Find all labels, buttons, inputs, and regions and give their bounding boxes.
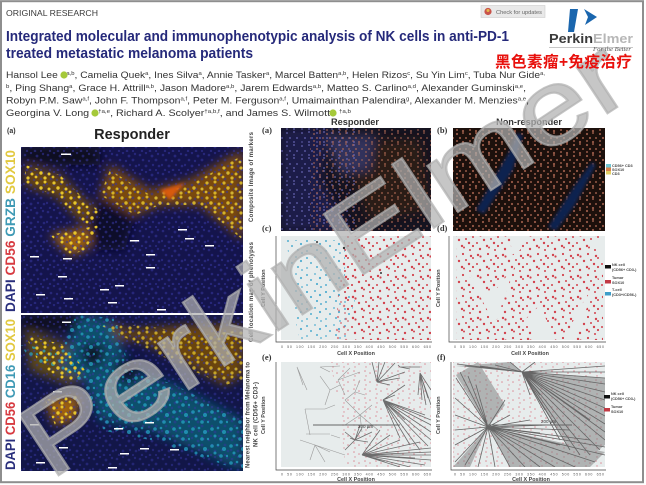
axis titles: Cell X Position: [511, 351, 549, 357]
headings: right columns: [331, 117, 562, 127]
legend: nearest neighbor: NK cell: [611, 392, 624, 396]
legend: nearest neighbor: (CD56+ CD3-): [611, 397, 636, 401]
authors: g: [406, 96, 409, 102]
panel (a): composite responder: [281, 128, 431, 231]
authors: , Camelia Quek: [75, 70, 145, 81]
panel letters: [262, 125, 448, 362]
authors: a: [145, 71, 149, 77]
authors: †a,b: [339, 109, 351, 115]
panel: microscopy bottom: [21, 315, 243, 471]
panel letters: (c): [262, 223, 272, 233]
authors: , Alexander M. Menzies: [409, 96, 518, 106]
authors: , and James S. Wilmott: [220, 108, 339, 119]
authors: , Jason Madore: [154, 83, 226, 94]
authors: , Umaimainthan Palendira: [286, 96, 407, 106]
authors: , Grace H. Attrill: [73, 83, 146, 94]
plot (d): cell location non-responder: [453, 236, 605, 340]
legend: composite: CD3: [612, 172, 620, 176]
authors: a,f: [180, 96, 188, 102]
red caption: 黑色素瘤+免疫治疗: [495, 52, 632, 71]
label: top image channels: DAPI CD56 GRZB SOX10: [3, 150, 19, 312]
legend: phenotypes: SOX10: [612, 281, 624, 285]
headings: right columns: Non-responder: [496, 117, 562, 127]
authors: a,e: [515, 84, 523, 90]
panel (b): composite non-responder: [453, 128, 605, 231]
legend: nearest neighbor: Tumor: [611, 405, 623, 409]
legend: phenotypes: NK cell: [612, 263, 625, 267]
authors: , Su Yin Lim: [410, 70, 465, 81]
axis titles: Cell Y Position: [261, 396, 267, 434]
panel letters: (d): [437, 223, 448, 233]
authors: b: [6, 84, 9, 90]
axis titles: Cell Y Position: [261, 269, 267, 307]
authors: Georgina V. Long: [6, 108, 80, 119]
authors: ,: [526, 96, 529, 106]
plot (e): nearest neighbor responder: [281, 362, 431, 467]
legend: nearest neighbor: SOX10: [611, 410, 623, 414]
axis titles: Cell Y Position: [436, 396, 442, 434]
authors: a: [69, 84, 74, 90]
authors: a,b: [66, 71, 75, 77]
axis ticks: 0 50 100 150 200 250 300 350 400 450 500 550 600 650: [281, 345, 431, 349]
legend: phenotypes: [605, 263, 637, 297]
axis ticks: [281, 345, 604, 476]
authors: a: [266, 71, 270, 77]
authors: c: [407, 71, 410, 77]
authors: a,e: [518, 96, 526, 102]
axis ticks: 0 50 100 150 200 250 300 350 400 450 500 550 600 650: [454, 472, 604, 476]
panel letters: (b): [437, 125, 448, 135]
authors: , Annie Tasker: [202, 70, 267, 81]
title: Integrated molecular and immunophenotypic analysis of NK cells in anti-PD-1: [6, 29, 509, 45]
authors: a,b: [313, 84, 321, 90]
icons: ORCID badges: [60, 71, 337, 117]
authors: Hansol Lee: [6, 70, 55, 81]
axis titles: Cell X Position: [337, 351, 375, 357]
authors: , Helen Rizos: [346, 70, 407, 81]
legend: composite: [606, 164, 633, 176]
authors: Robyn P.M. Saw: [6, 96, 76, 106]
authors: †a,e: [98, 109, 110, 115]
authors: a: [199, 71, 203, 77]
authors: , Jarem Edwards: [234, 83, 313, 94]
legend: nearest neighbor: [604, 392, 636, 414]
authors: a,d: [408, 84, 416, 90]
authors: a,b: [146, 84, 154, 90]
row labels: Composite Image of markers: [249, 131, 255, 222]
label: bottom image channels: DAPI CD56 CD16 SOX10: [3, 319, 19, 470]
badge: check for updates: [481, 6, 545, 18]
logo: PerkinElmer: For the Better: [592, 47, 632, 53]
axis titles: Cell X Position: [337, 477, 375, 483]
authors: a,b: [226, 84, 234, 90]
legend: composite: CD56+ CD3: [612, 164, 633, 168]
authors: , Matteo S. Carlino: [321, 83, 408, 94]
authors: , John F. Thompson: [89, 96, 180, 106]
plot (e): nearest neighbor responder: 200 µm: [358, 424, 373, 429]
authors: , Peter M. Ferguson: [187, 96, 279, 106]
heading: Responder left: Responder: [94, 127, 170, 143]
axis titles: Cell X Position: [512, 477, 550, 483]
panel letters: (f): [437, 352, 446, 362]
authors: a,f: [82, 96, 90, 102]
authors: , Tuba Nur Gide: [468, 70, 540, 81]
axis titles: [261, 269, 550, 483]
authors: a,f: [279, 96, 286, 102]
legend: phenotypes: Tumor: [612, 276, 624, 280]
axes: [276, 236, 606, 470]
authors: ,: [523, 83, 526, 94]
title: treated metastatic melanoma patients: [6, 46, 253, 62]
headings: right columns: Responder: [331, 117, 379, 127]
plot (f): nearest neighbor non-responder: [453, 362, 605, 467]
authors: , Ines Silva: [148, 70, 199, 81]
plot (f): nearest neighbor non-responder: 200 µm: [541, 419, 556, 424]
axis ticks: 0 50 100 150 200 250 300 350 400 450 500 550 600 650: [281, 472, 431, 476]
section label: ORIGINAL RESEARCH: [6, 8, 98, 18]
panel label: (a): [7, 128, 16, 135]
axis ticks: 0 50 100 150 200 250 300 350 400 450 500 550 600 650: [454, 345, 604, 349]
legend: phenotypes: (CD56+ CD3-): [612, 268, 637, 272]
row labels: Cell location map of phenotypes: [249, 241, 255, 342]
authors: , Marcel Batten: [269, 70, 338, 81]
panel letters: (a): [262, 125, 272, 135]
authors: †a,b,f: [204, 109, 220, 115]
logo: PerkinElmer: [549, 9, 633, 53]
legend: phenotypes: (CD3+/CD56-): [612, 293, 637, 297]
plot (c): cell location responder: [281, 236, 431, 340]
legend: composite: SOX10: [612, 168, 624, 172]
authors: , Alexander Guminski: [416, 83, 515, 94]
legend: phenotypes: T-cell: [612, 288, 622, 292]
panel letters: (e): [262, 352, 272, 362]
authors: , Ping Shang: [9, 83, 69, 94]
authors: c: [465, 71, 468, 77]
authors: a,b: [338, 71, 346, 77]
badge: check for updates: Check for updates: [496, 10, 542, 16]
authors: [6, 70, 545, 119]
row labels: NK cell (CD56+ CD3-): [254, 382, 260, 447]
row labels: Nearest neighbor from Melanoma to: [246, 362, 252, 468]
axis titles: Cell Y Position: [436, 269, 442, 307]
title: [6, 29, 509, 62]
logo: PerkinElmer: Perkin Elmer: [549, 31, 633, 46]
authors: , Richard A. Scolyer: [110, 108, 205, 119]
row labels: [246, 131, 260, 468]
authors: a,: [540, 71, 545, 77]
panel: microscopy top: [21, 147, 243, 313]
